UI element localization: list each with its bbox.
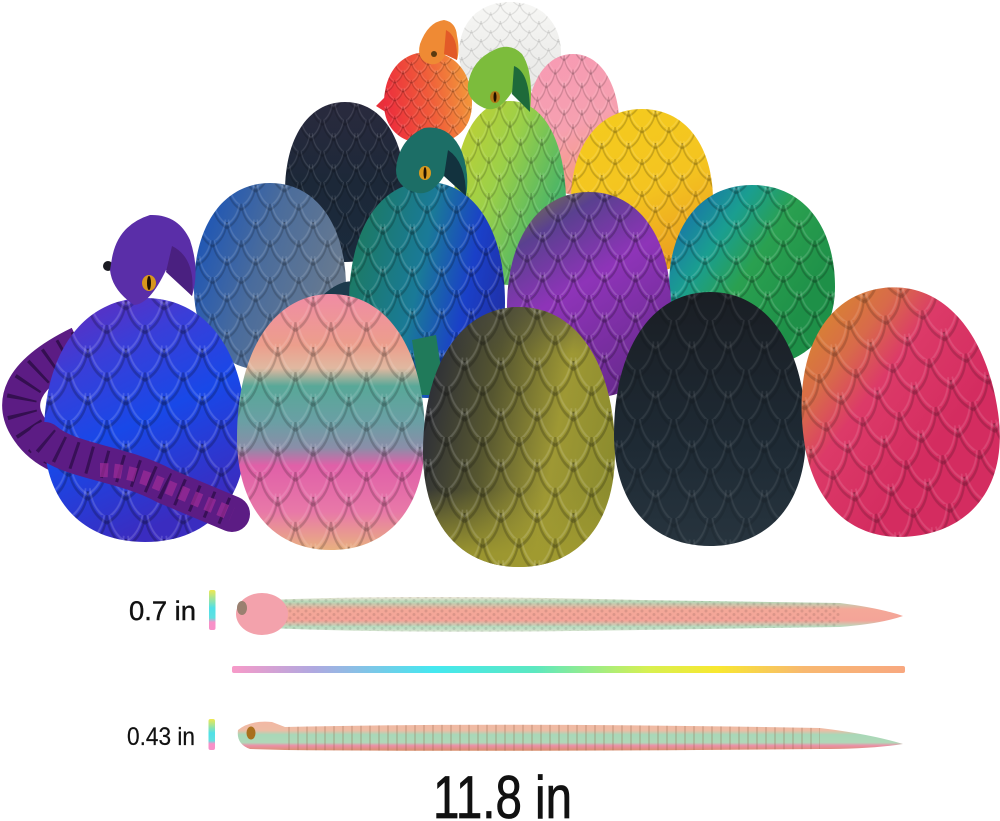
icon: width tick lower [208,719,215,750]
snake: orange head on red egg [376,20,472,144]
wide snake [236,593,903,635]
egg: olive and black [423,307,615,567]
egg: yellow [571,109,713,273]
egg: white [459,2,561,94]
egg: steel blue [194,183,346,371]
egg: black [614,292,806,546]
egg: teal green [669,185,835,367]
egg: purple [507,192,671,398]
snake: green head on green egg [454,47,566,285]
label: 0.7 in: 0.7 in [129,596,196,626]
egg: rainbow [237,294,425,550]
icon: width tick upper [209,590,216,630]
rainbow length bar [232,666,905,673]
snake: purple body around blue egg [21,215,246,542]
egg group: dragon eggs [21,2,1000,567]
egg: coral [785,275,1000,549]
egg: dark navy [285,102,405,262]
egg: pink [526,54,620,194]
narrow snake [238,722,903,751]
label: 0.43 in: 0.43 in [127,723,195,751]
snake: teal head on teal-blue egg [322,128,505,398]
